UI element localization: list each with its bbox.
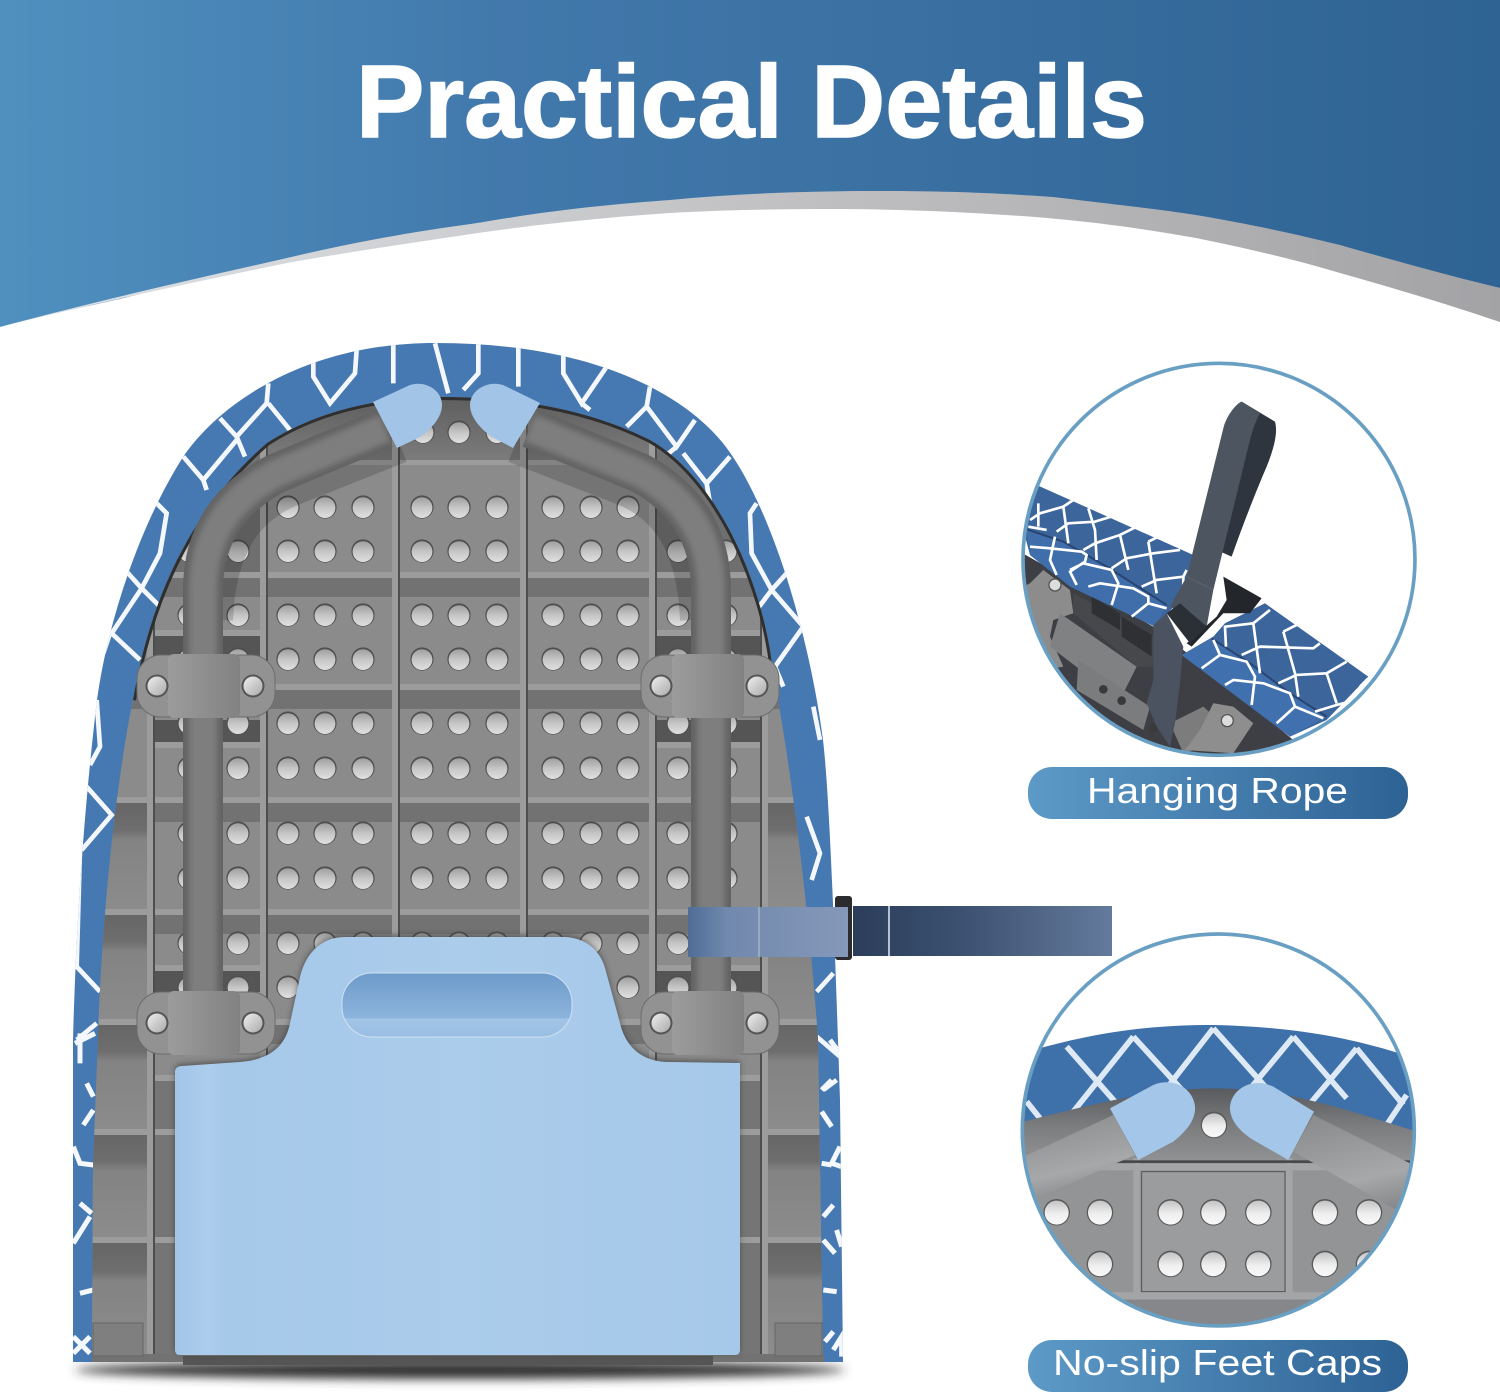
handle slot	[342, 973, 572, 1037]
circle outline	[1022, 934, 1414, 1326]
frame below the rails	[1017, 550, 1293, 763]
label pill: hanging rope	[1028, 767, 1408, 819]
left folding leg tube	[203, 428, 385, 1010]
label pill: hanging rope: Hanging Rope	[1087, 770, 1348, 811]
right folding leg tube	[530, 428, 711, 1010]
board bottom edge	[92, 1354, 824, 1365]
detail circle: no-slip feet caps	[1017, 934, 1423, 1338]
ribs	[90, 395, 830, 1360]
top left clamp	[137, 654, 275, 718]
left foot cap	[373, 384, 442, 448]
cell shading bands	[90, 578, 830, 1044]
ironing board underside	[73, 340, 1112, 1379]
caps	[1110, 1082, 1195, 1160]
right foot cap	[470, 384, 540, 448]
tube shadows	[215, 445, 698, 620]
bottom right clamp	[641, 991, 779, 1055]
detail circle: hanging rope	[1017, 363, 1415, 763]
right corner foot	[775, 1323, 822, 1356]
grey panel	[1036, 1160, 1410, 1300]
inner edge shadow	[133, 397, 773, 700]
circle outline	[1023, 363, 1415, 755]
bottom left clamp	[137, 991, 275, 1055]
ground shadow	[75, 1361, 845, 1379]
light blue handle panel	[175, 935, 740, 1355]
holes	[1043, 1112, 1382, 1277]
fabric rails, right	[1182, 603, 1368, 737]
tubes	[1026, 1115, 1135, 1191]
label pill: no-slip feet caps	[1028, 1340, 1408, 1392]
header banner	[0, 0, 1500, 327]
top right clamp	[641, 654, 779, 718]
fabric rails, left	[1023, 485, 1193, 627]
left corner foot	[93, 1323, 143, 1356]
grey plastic grid panel	[80, 390, 840, 1365]
strap and buckle	[1217, 402, 1276, 557]
fabric	[1017, 1025, 1423, 1133]
label pill: no-slip feet caps: No-slip Feet Caps	[1053, 1342, 1382, 1383]
fabric cover	[73, 340, 843, 1362]
hanging strap on board	[688, 896, 1112, 960]
perforation holes	[177, 420, 738, 999]
title: Practical Details	[356, 44, 1147, 159]
